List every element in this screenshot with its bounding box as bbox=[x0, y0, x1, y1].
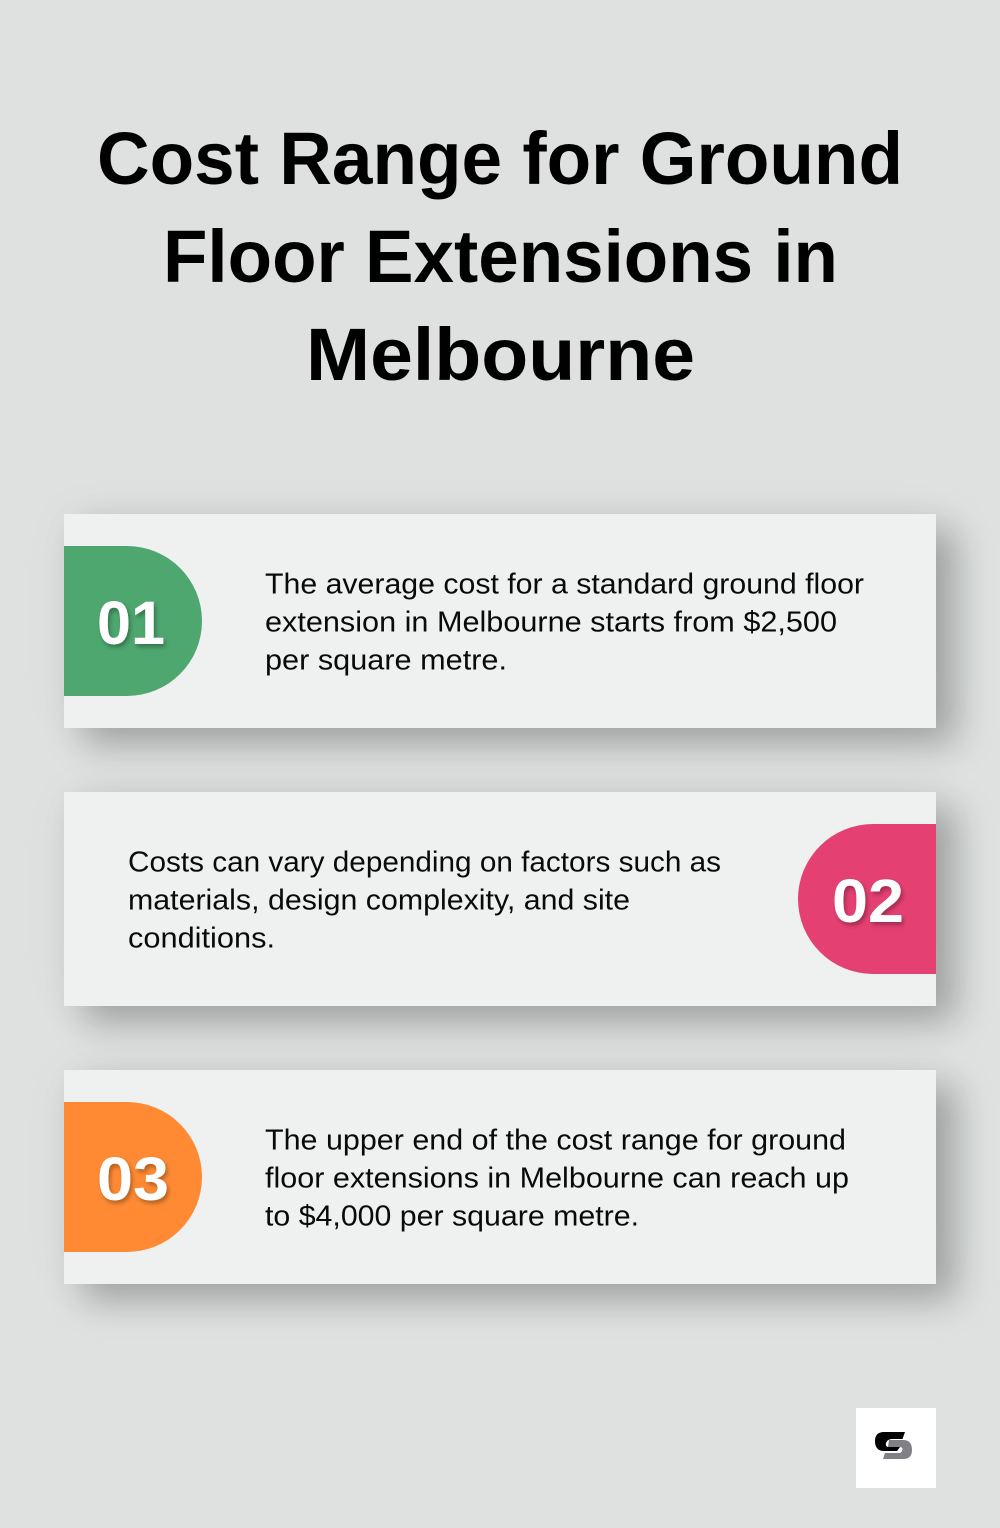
text block: card 2: conditions. bbox=[128, 922, 275, 954]
title: Floor Extensions in bbox=[163, 215, 838, 298]
badge: 02 bbox=[798, 824, 936, 974]
panel: card 3 background bbox=[64, 1070, 936, 1284]
text block: card 2 bbox=[128, 846, 721, 954]
title bbox=[97, 117, 903, 396]
title: Melbourne bbox=[306, 313, 695, 396]
badge: 01: 01 bbox=[97, 589, 165, 657]
text block: card 3: The upper end of the cost range for ground bbox=[265, 1124, 846, 1156]
text block: card 3: floor extensions in Melbourne can reach up bbox=[265, 1162, 849, 1194]
text block: card 1 bbox=[265, 568, 864, 676]
panel: card 2 background bbox=[64, 792, 936, 1006]
text block: card 2: Costs can vary depending on factors such as bbox=[128, 846, 721, 878]
panel: card 1 background bbox=[64, 514, 936, 728]
badge: 03 bbox=[64, 1102, 202, 1252]
text block: card 2: materials, design complexity, and site bbox=[128, 884, 630, 916]
text block: card 3: to $4,000 per square metre. bbox=[265, 1200, 639, 1232]
title: Cost Range for Ground bbox=[97, 117, 903, 200]
text block: card 3 bbox=[265, 1124, 849, 1232]
badge: 01 bbox=[64, 546, 202, 696]
logo bbox=[856, 1408, 936, 1488]
text block: card 1: per square metre. bbox=[265, 644, 507, 676]
badge: 02: 02 bbox=[832, 867, 904, 935]
text block: card 1: extension in Melbourne starts from $2,500 bbox=[265, 606, 837, 638]
text block: card 1: The average cost for a standard ground floor bbox=[265, 568, 864, 600]
badge: 03: 03 bbox=[97, 1145, 169, 1213]
